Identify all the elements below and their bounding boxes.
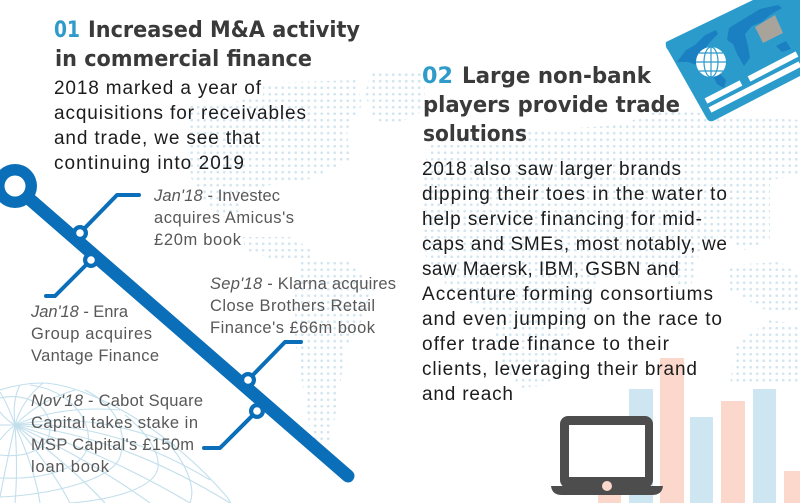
text block: section 02 body: Accenture forming consortiums bbox=[422, 284, 713, 305]
callout: Cabot Square: Nov'18 - Cabot Square bbox=[31, 392, 203, 410]
heading 01 bbox=[54, 18, 360, 72]
timeline with stations bbox=[0, 164, 348, 476]
callout: Klarna: Close Brothers Retail bbox=[210, 297, 375, 315]
callout: Klarna bbox=[210, 275, 396, 337]
callout: Enra: Vantage Finance bbox=[31, 347, 159, 365]
heading 02: 02 bbox=[422, 64, 453, 89]
text block: section 01 body: acquisitions for receivables bbox=[54, 103, 306, 124]
text block: section 02 body: clients, leveraging their brand bbox=[422, 359, 697, 380]
background dotted world map bbox=[187, 72, 800, 445]
callout: Investec: acquires Amicus's bbox=[154, 209, 294, 227]
callout: Enra: Group acquires bbox=[31, 325, 152, 343]
text block: section 01 body: 2018 marked a year of bbox=[54, 78, 262, 99]
callout: Investec: £20m book bbox=[154, 231, 242, 249]
callout: Investec: Jan'18 - Investec bbox=[153, 187, 280, 205]
text block: section 01 body: and trade, we see that bbox=[54, 128, 261, 149]
text block: section 01 body: continuing into 2019 bbox=[54, 153, 244, 174]
bar chart decoration bbox=[598, 358, 800, 503]
callout: Cabot Square: loan book bbox=[31, 458, 110, 476]
heading 02: solutions bbox=[423, 122, 527, 147]
text block: section 02 body bbox=[422, 159, 727, 405]
heading 02: Large non-bank bbox=[462, 64, 652, 89]
heading 02 bbox=[422, 64, 680, 147]
icon: laptop bbox=[551, 416, 663, 495]
text block: section 02 body: and reach bbox=[422, 384, 513, 405]
text block: section 02 body: saw Maersk, IBM, GSBN and bbox=[422, 259, 679, 280]
text block: section 02 body: dipping their toes in the water to bbox=[422, 184, 727, 205]
heading 01: 01 bbox=[54, 18, 80, 43]
text block: section 01 body bbox=[54, 78, 306, 174]
text block: section 02 body: caps and SMEs, most notably, we bbox=[422, 234, 727, 255]
callout: Cabot Square bbox=[31, 392, 203, 476]
heading 01: Increased M&A activity bbox=[88, 18, 360, 43]
callout: Cabot Square: MSP Capital's £150m bbox=[31, 436, 194, 454]
callout: Investec bbox=[153, 187, 294, 249]
callout: Klarna: Finance's £66m book bbox=[210, 319, 376, 337]
callout: Enra bbox=[30, 303, 159, 365]
callout: Cabot Square: Capital takes stake in bbox=[31, 414, 198, 432]
heading 02: players provide trade bbox=[423, 93, 680, 118]
text block: section 02 body: 2018 also saw larger brands bbox=[422, 159, 681, 180]
text block: section 02 body: help service financing for mid- bbox=[422, 209, 702, 230]
callout: Enra: Jan'18 - Enra bbox=[30, 303, 129, 321]
heading 01: in commercial finance bbox=[55, 47, 312, 72]
background globe wireframe bbox=[0, 383, 231, 503]
callout: Klarna: Sep'18 - Klarna acquires bbox=[210, 275, 396, 293]
icon: bank card with world map bbox=[666, 0, 800, 121]
text block: section 02 body: offer trade finance to their bbox=[422, 334, 670, 355]
text block: section 02 body: and even jumping on the race to bbox=[422, 309, 722, 330]
